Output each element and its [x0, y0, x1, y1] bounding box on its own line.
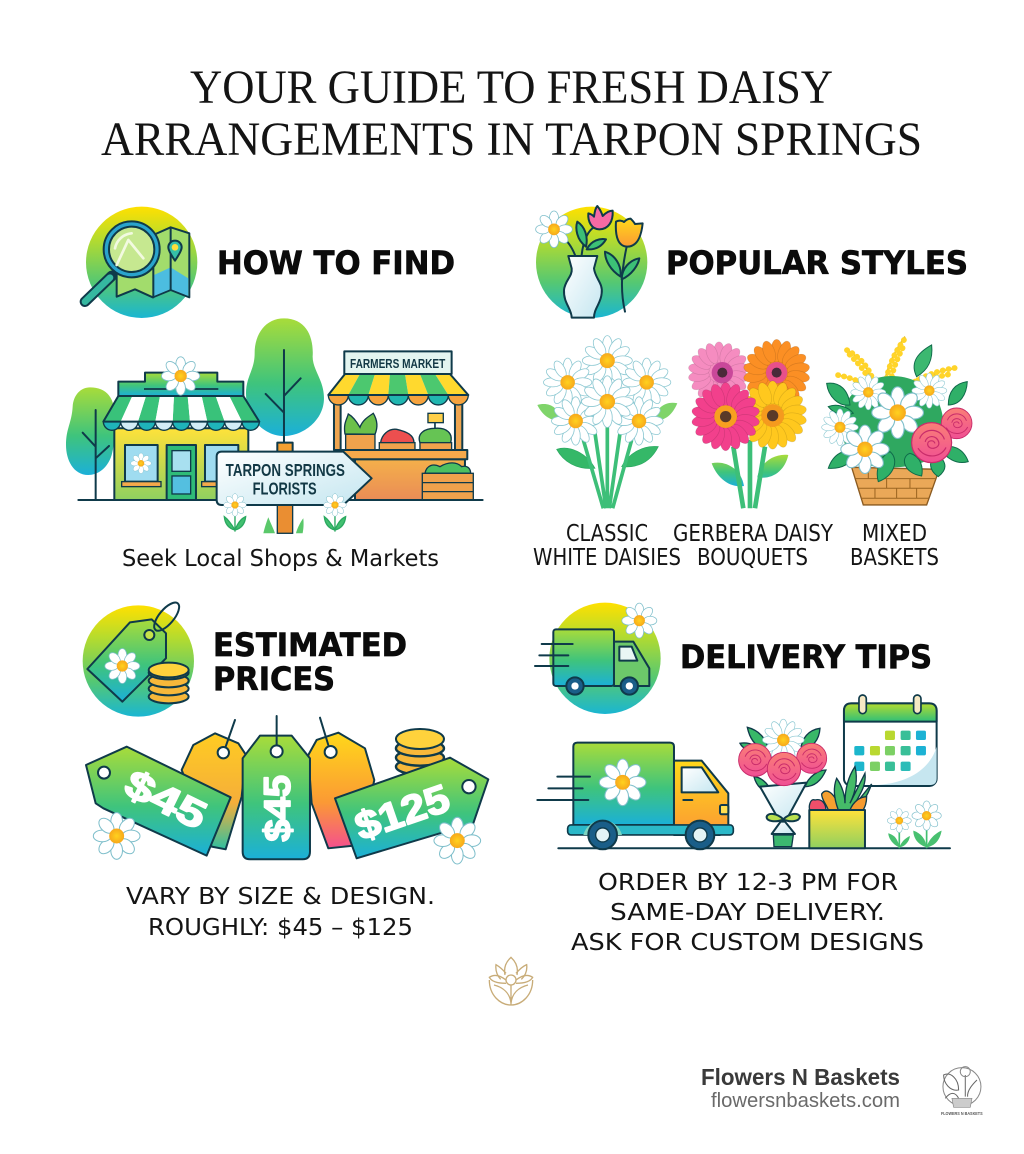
illustration: truck, bouquet, groceries, calendar	[537, 695, 950, 849]
small flowers	[887, 801, 942, 848]
panel: popular styles	[533, 206, 972, 571]
icon: vase and flowers	[536, 206, 647, 318]
caption: seek local shops: Seek Local Shops & Markets	[122, 546, 439, 572]
grocery bag	[809, 767, 872, 848]
caption: delivery advice	[571, 870, 924, 956]
tag: $45 left	[86, 747, 231, 856]
title	[101, 61, 922, 166]
icon: price tag and coins	[83, 599, 194, 717]
panel: estimated prices	[83, 599, 488, 941]
heading: popular styles: POPULAR STYLES	[666, 244, 968, 282]
footer: brand name and url: flowersnbaskets.com	[711, 1090, 900, 1112]
caption: mixed baskets	[850, 521, 939, 571]
tag: $45 upright	[243, 716, 310, 859]
signpost: Tarpon Springs Florists	[217, 443, 372, 533]
caption: mixed baskets: MIXED	[862, 521, 927, 547]
back tags	[182, 718, 374, 849]
heading: estimated prices: PRICES	[213, 660, 335, 698]
footer: brand name and url	[701, 1064, 900, 1112]
illustration: gerbera bouquet	[688, 339, 810, 508]
tag: $125 right: $125	[350, 776, 455, 849]
caption: delivery advice: SAME-DAY DELIVERY.	[610, 900, 885, 926]
coin stack	[396, 729, 444, 775]
trees	[66, 318, 324, 500]
caption: price range: VARY BY SIZE & DESIGN.	[126, 884, 435, 910]
caption: classic white daisies: CLASSIC	[566, 521, 648, 547]
illustration: shop, market and sign	[66, 318, 483, 533]
caption: classic white daisies	[533, 521, 681, 571]
caption: gerbera daisy bouquets: BOUQUETS	[697, 545, 808, 571]
caption: delivery advice: ASK FOR CUSTOM DESIGNS	[571, 930, 924, 956]
caption: price range	[126, 884, 435, 941]
florist shop	[103, 357, 259, 500]
signpost: Tarpon Springs Florists: FLORISTS	[253, 479, 317, 499]
tag: $45 left: $45	[118, 762, 214, 838]
illustration: price tags	[86, 716, 488, 864]
illustration: mixed basket	[822, 337, 972, 505]
caption: gerbera daisy bouquets	[673, 521, 834, 571]
icon: lotus emblem	[489, 957, 533, 1005]
tag: $125 right	[335, 758, 488, 858]
icon: magnifier and map	[85, 207, 197, 318]
delivery truck	[537, 743, 733, 849]
signpost: Tarpon Springs Florists: TARPON SPRINGS	[226, 460, 345, 480]
caption: mixed baskets: BASKETS	[850, 545, 939, 571]
icon: brand logo: FLOWERS N BASKETS	[941, 1111, 983, 1117]
icon: brand logo	[941, 1067, 983, 1117]
caption: gerbera daisy bouquets: GERBERA DAISY	[673, 521, 834, 547]
heading: delivery tips: DELIVERY TIPS	[680, 638, 932, 676]
flower bouquet	[739, 719, 827, 847]
farmers market stall: FARMERS MARKET	[350, 357, 446, 371]
footer: brand name and url: Flowers N Baskets	[701, 1064, 900, 1090]
calendar	[844, 695, 937, 786]
farmers market stall	[328, 351, 473, 500]
caption: classic white daisies: WHITE DAISIES	[533, 545, 681, 571]
heading: estimated prices: ESTIMATED	[213, 626, 407, 664]
illustration: white daisy bouquet	[537, 336, 677, 508]
title: ARRANGEMENTS IN TARPON SPRINGS	[101, 113, 922, 166]
panel: how to find	[66, 207, 483, 572]
panel: delivery tips	[535, 603, 950, 956]
heading: how to find: HOW TO FIND	[217, 244, 455, 282]
tag: $45 upright: $45	[256, 775, 298, 842]
caption: price range: ROUGHLY: $45 – $125	[148, 915, 413, 941]
heading: estimated prices	[213, 626, 407, 698]
title: YOUR GUIDE TO FRESH DAISY	[190, 61, 833, 114]
caption: delivery advice: ORDER BY 12-3 PM FOR	[598, 870, 898, 896]
icon: delivery truck	[535, 603, 661, 714]
